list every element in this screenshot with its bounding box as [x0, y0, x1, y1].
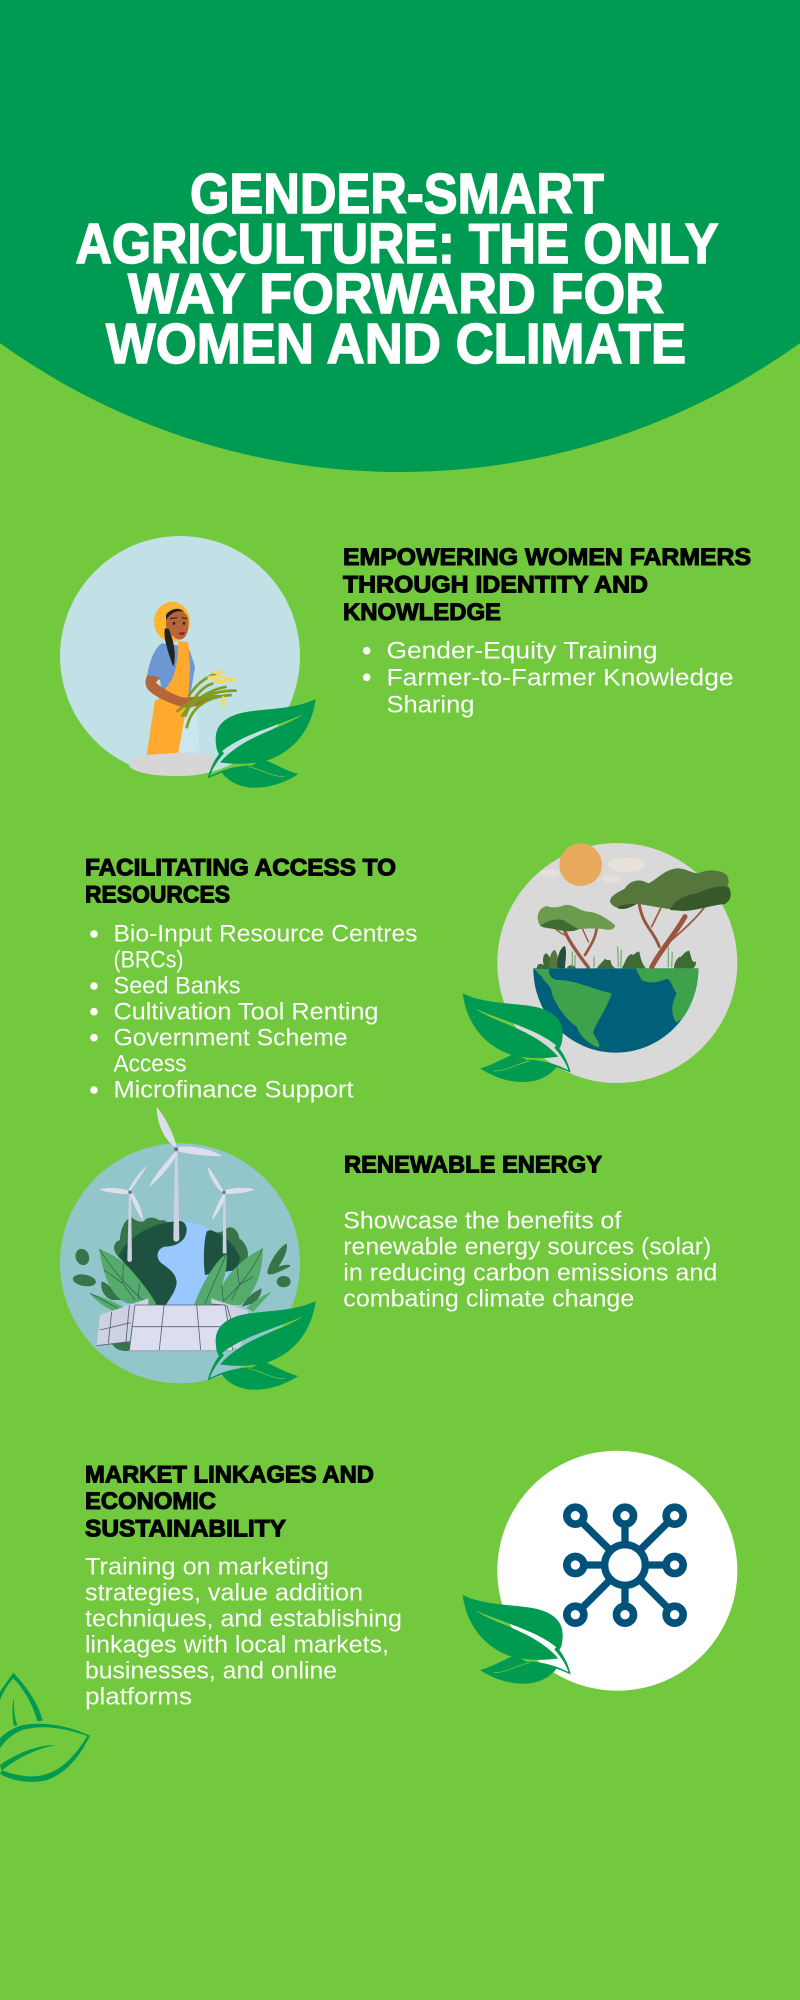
icon: leaf: [463, 1595, 571, 1684]
heading: [85, 855, 396, 908]
bullet list: (BRCs): [114, 947, 184, 974]
panel: renewable energy: [60, 1107, 717, 1390]
body text: strategies, value addition: [85, 1579, 363, 1606]
icon: leaf: [208, 699, 316, 788]
illustration circle: grey: [497, 843, 737, 1083]
body text: businesses, and online: [85, 1657, 337, 1684]
title: [76, 162, 718, 376]
panel: empowering women farmers: [60, 536, 751, 788]
heading: EMPOWERING WOMEN FARMERS: [343, 544, 751, 571]
heading: FACILITATING ACCESS TO: [85, 855, 396, 882]
icon: woman farmer holding rice: [129, 602, 237, 776]
body text: Training on marketing: [85, 1553, 329, 1580]
bullet list: Sharing: [386, 691, 474, 718]
heading: RENEWABLE ENERGY: [344, 1152, 602, 1179]
bullet list: Gender-Equity Training: [386, 637, 658, 664]
bullet list: [90, 921, 417, 1104]
body text: linkages with local markets,: [85, 1631, 389, 1658]
illustration circle: white: [497, 1451, 737, 1691]
title: WOMEN AND CLIMATE: [106, 312, 686, 376]
bullet list: [363, 637, 734, 718]
heading: ECONOMIC: [85, 1488, 216, 1515]
bullet list: Access: [114, 1051, 186, 1078]
illustration circle: pale blue: [60, 536, 300, 776]
body text: Showcase the benefits of: [343, 1207, 622, 1234]
heading: RESOURCES: [85, 881, 230, 908]
icon: network hub: [567, 1507, 683, 1623]
bullet list: Seed Banks: [114, 973, 240, 1000]
body text: renewable energy sources (solar): [343, 1233, 711, 1260]
header: dark green curved banner: [0, 0, 800, 472]
panel: access to resources: [85, 843, 737, 1104]
illustration circle: teal: [60, 1143, 300, 1383]
bullet list: Bio-Input Resource Centres: [114, 921, 418, 948]
heading: KNOWLEDGE: [343, 599, 501, 626]
icon: outlined leaf bottom left: [0, 1673, 90, 1782]
body text: in reducing carbon emissions and: [343, 1259, 717, 1286]
bullet list: Microfinance Support: [114, 1077, 354, 1104]
title: GENDER-SMART: [190, 162, 604, 226]
heading: MARKET LINKAGES AND: [85, 1461, 374, 1488]
panel: market linkages: [85, 1451, 737, 1710]
body text: combating climate change: [343, 1285, 634, 1312]
heading: SUSTAINABILITY: [85, 1516, 286, 1543]
body text: [343, 1207, 717, 1312]
body text: techniques, and establishing: [85, 1605, 402, 1632]
title: WAY FORWARD FOR: [128, 262, 664, 326]
bullet list: Farmer-to-Farmer Knowledge: [386, 664, 734, 691]
icon: half globe with trees and sun: [533, 843, 731, 1053]
icon: wind turbines, earth and solar panels: [72, 1107, 291, 1352]
heading: [85, 1461, 374, 1543]
heading: THROUGH IDENTITY AND: [343, 571, 648, 598]
heading: [343, 544, 751, 626]
icon: leaf: [463, 993, 571, 1082]
bullet list: Cultivation Tool Renting: [114, 999, 378, 1026]
body text: [85, 1553, 402, 1710]
icon: leaf: [208, 1301, 316, 1390]
body text: platforms: [85, 1683, 192, 1710]
bullet list: Government Scheme: [114, 1025, 348, 1052]
title: AGRICULTURE: THE ONLY: [76, 212, 718, 276]
